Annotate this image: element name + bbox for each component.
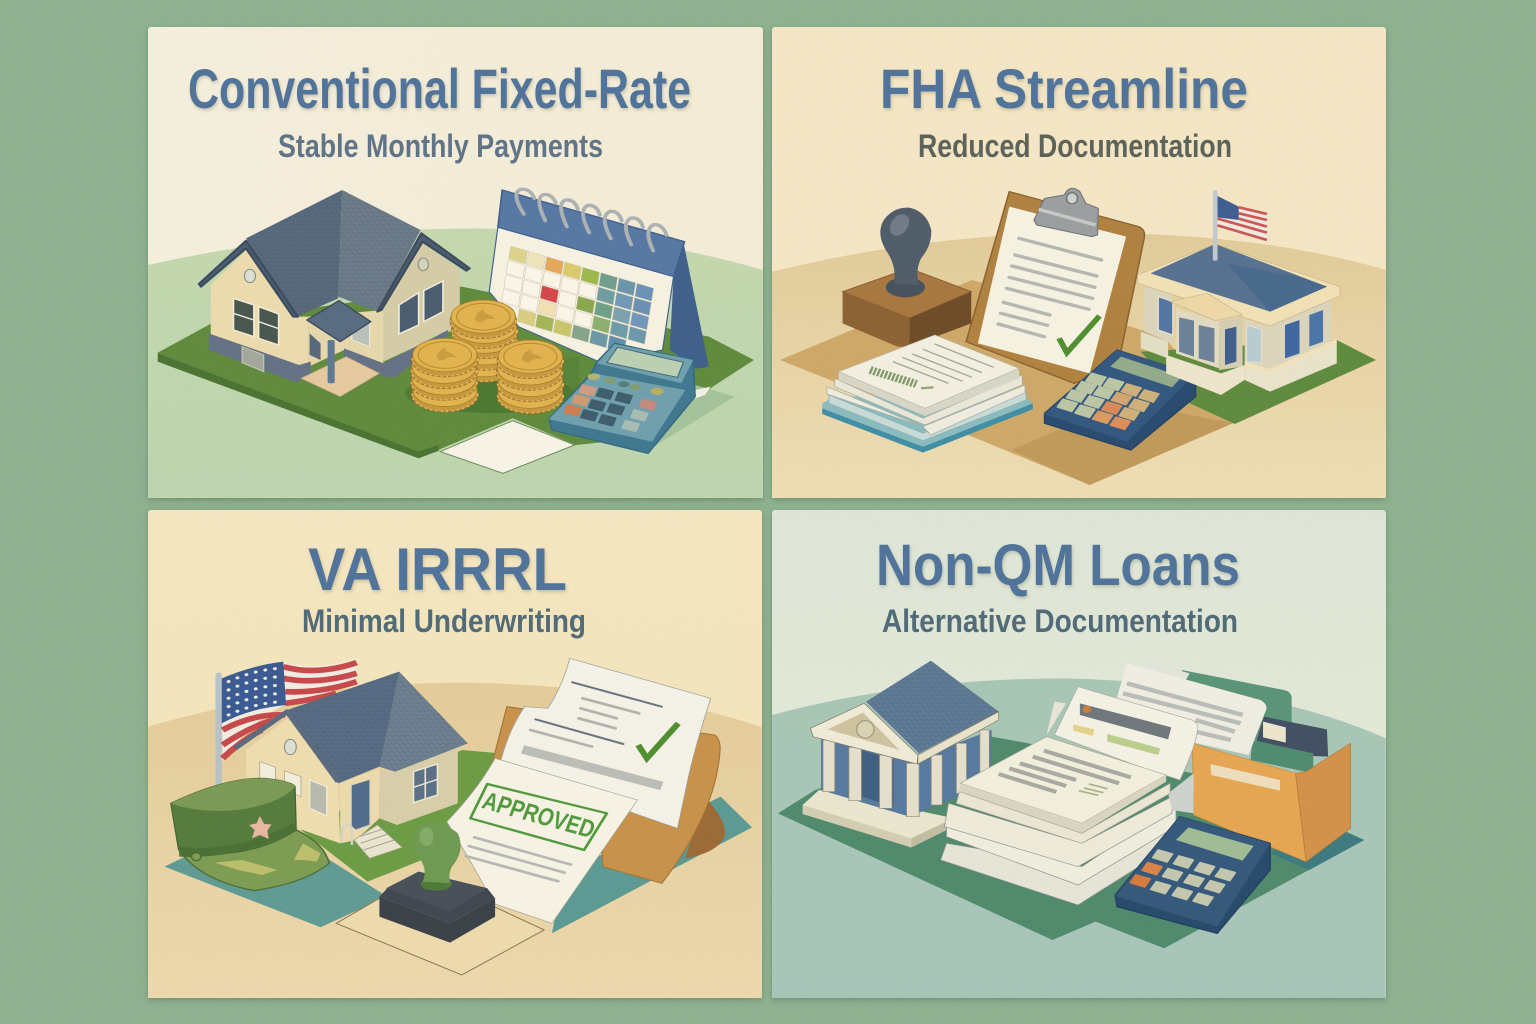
calendar	[489, 189, 709, 369]
approved stamp	[470, 784, 607, 850]
panel 2 card	[772, 27, 1386, 498]
document stack	[941, 687, 1198, 905]
coin stacks	[405, 300, 574, 414]
title: fha streamline: FHA Streamline	[880, 57, 1248, 120]
calculator	[549, 343, 711, 453]
teal hill	[772, 678, 1386, 998]
clipboard	[966, 188, 1145, 383]
calculator	[1045, 350, 1196, 450]
subtitle: minimal underwriting: Minimal Underwriting	[302, 603, 586, 639]
house	[199, 190, 470, 397]
tan hill	[148, 683, 762, 998]
illustration: flag, house, cap, stamp and approved documents	[148, 658, 762, 998]
house	[235, 672, 468, 858]
documents in folder	[493, 658, 725, 883]
tan mat	[780, 280, 1233, 485]
panel 1 card	[148, 27, 763, 498]
title: va irrrl: VA IRRRL	[308, 536, 567, 603]
panel: fha streamline	[772, 27, 1386, 498]
subtitle: alternative documentation: Alternative Documentation	[882, 603, 1238, 639]
illustration: house, coins, calendar and calculator	[148, 189, 763, 498]
subtitle: reduced documentation: Reduced Documentation	[918, 128, 1232, 164]
government building	[1138, 190, 1340, 395]
military cap	[171, 778, 329, 891]
approved stamp: APPROVED	[479, 787, 599, 843]
subtitle: stable monthly payments: Stable Monthly Payments	[278, 128, 603, 164]
american flag	[215, 658, 357, 788]
illustration: bank, documents, folder and calculator	[772, 660, 1386, 998]
panel: conventional fixed-rate	[148, 27, 763, 498]
tan hill	[772, 233, 1386, 498]
calendar spiral rings	[516, 189, 666, 251]
panel 4 card	[772, 510, 1386, 998]
back document	[1109, 660, 1267, 755]
calculator	[1115, 817, 1270, 933]
folder	[1109, 660, 1350, 862]
paper sheet	[440, 421, 575, 473]
green mat	[778, 737, 1364, 948]
bank	[803, 661, 999, 847]
approved document	[447, 758, 637, 923]
panel 3 card	[148, 510, 762, 998]
green lawn	[1141, 340, 1376, 424]
title: non-qm loans: Non-QM Loans	[876, 533, 1240, 598]
rubber stamp	[843, 208, 971, 347]
panel: va irrrl	[148, 510, 762, 998]
illustration: stamp, clipboard, paper stack, calculator and building	[772, 188, 1386, 498]
paper stack	[822, 335, 1033, 453]
green hill	[148, 228, 763, 498]
panel: non-qm loans	[772, 510, 1386, 998]
green stamp	[379, 824, 495, 943]
teal mats	[164, 797, 752, 933]
beige sheet	[336, 873, 544, 975]
lawn	[301, 750, 501, 882]
title: conventional fixed-rate: Conventional Fixed-Rate	[188, 57, 691, 120]
green ground mat	[158, 287, 754, 458]
clipboard clip	[1034, 188, 1098, 237]
flag	[1218, 196, 1267, 242]
